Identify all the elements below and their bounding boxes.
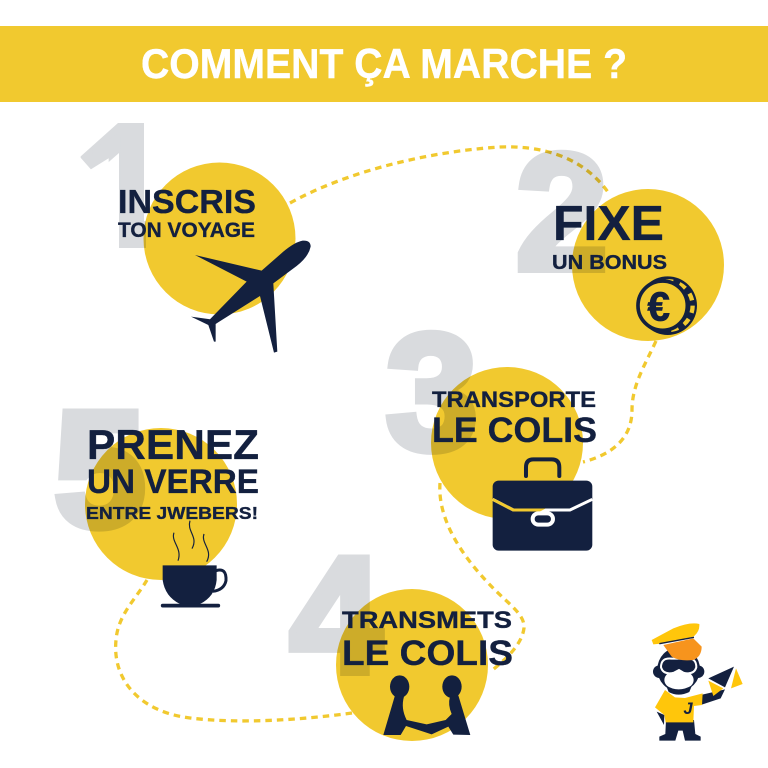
step 5 text [86, 421, 259, 523]
letter flag [708, 667, 734, 687]
mascot: monkey postman [652, 623, 743, 741]
icon: airplane [191, 241, 311, 353]
step 5 text: UN VERRE [87, 463, 259, 501]
icon: coffee cup [163, 521, 226, 606]
number 2: 2 [516, 120, 608, 304]
dashed route [116, 147, 656, 721]
number 5: 5 [54, 377, 146, 561]
number 4: 4 [290, 523, 382, 707]
step 1 text: INSCRIS [118, 183, 256, 220]
step 2 text [552, 197, 667, 274]
shirt logo: J [683, 699, 693, 718]
muzzle [664, 670, 694, 690]
step 1 text [118, 183, 256, 242]
goggles [661, 659, 696, 673]
step 1 text: TON VOYAGE [118, 219, 255, 242]
step 2 text: UN BONUS [552, 251, 667, 274]
number 3: 3 [386, 300, 478, 484]
step 5 text: ENTRE JWEBERS! [86, 503, 258, 523]
step 4 text [342, 607, 513, 673]
right arm [701, 689, 725, 705]
step 4 text: LE COLIS [342, 634, 513, 673]
step 4 text: TRANSMETS [342, 607, 512, 634]
shirt [655, 690, 703, 722]
step 2 text: FIXE [553, 197, 664, 251]
title banner [0, 26, 768, 102]
ears and head [653, 665, 666, 678]
icon: handshake [383, 675, 470, 735]
step 5 text: PRENEZ [87, 421, 259, 468]
icon: euro coin [638, 276, 697, 335]
step 3 text [432, 387, 597, 450]
title banner: COMMENT ÇA MARCHE ? [141, 40, 627, 87]
step circles [85, 162, 724, 741]
icon: briefcase [493, 459, 592, 551]
step 3 text: LE COLIS [432, 411, 597, 450]
cap [663, 638, 702, 660]
number 1: 1 [75, 92, 170, 282]
icon: euro coin: € [647, 284, 670, 330]
legs and left arm [659, 720, 701, 741]
step 3 text: TRANSPORTE [432, 387, 596, 412]
